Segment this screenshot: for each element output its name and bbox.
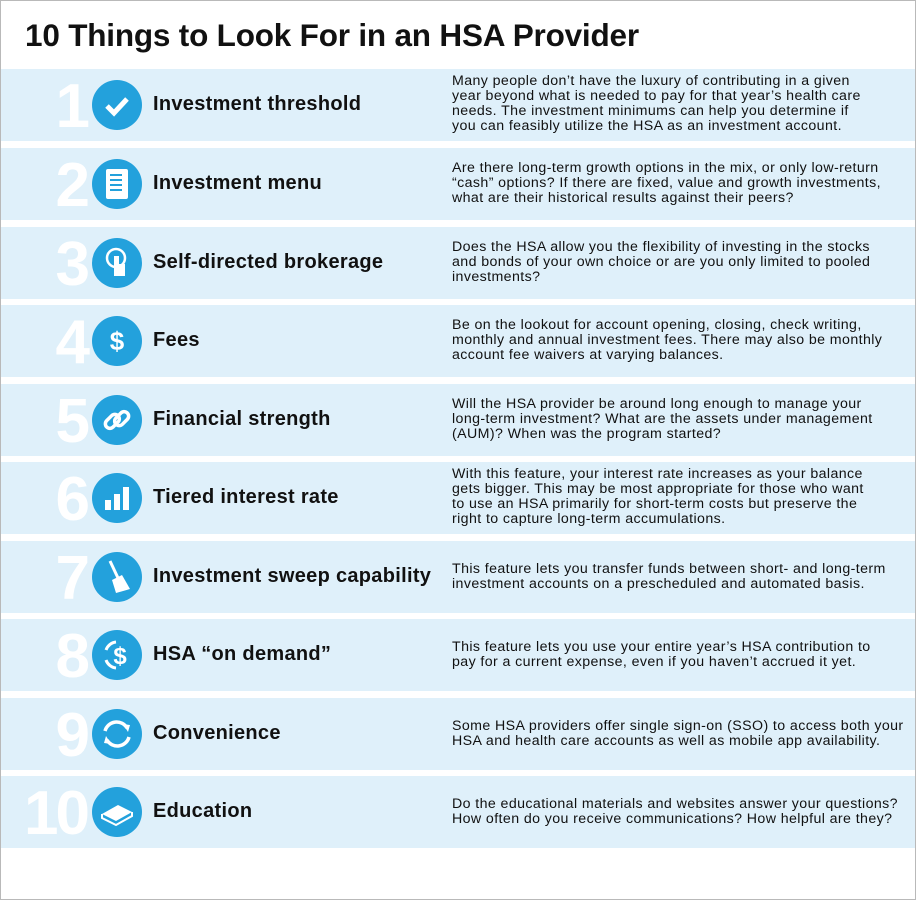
row 2: Investment menu (153, 172, 322, 194)
row 1: Many people don’t have the luxury of contributing in a given (452, 73, 850, 89)
row 10: How often do you receive communications? How helpful are they? (452, 811, 892, 827)
row 7 (1, 541, 915, 613)
icon: broom (92, 552, 142, 602)
row 1: year beyond what is needed to pay for that year’s health care (452, 88, 861, 104)
title: 10 Things to Look For in an HSA Provider (25, 17, 639, 53)
row 5: (AUM)? When was the program started? (452, 426, 721, 442)
icon: bars (92, 473, 142, 523)
row 5: Will the HSA provider be around long enough to manage your (452, 396, 862, 412)
row 7: This feature lets you transfer funds between short- and long-term (452, 561, 886, 577)
row 3: 3 (56, 230, 87, 299)
row 10: 10 (24, 779, 87, 848)
row 4: 4 (56, 308, 87, 377)
row 3: Does the HSA allow you the flexibility of investing in the stocks (452, 239, 870, 255)
row 8 (1, 619, 915, 691)
row 9: 9 (56, 701, 87, 770)
row 8: HSA “on demand” (153, 643, 331, 665)
row 8: 8 (56, 622, 87, 691)
row 1: 1 (56, 72, 87, 141)
row 6: to use an HSA primarily for short-term costs but preserve the (452, 496, 857, 512)
icon: book (92, 787, 142, 837)
icon: link (92, 395, 142, 445)
row 5: 5 (56, 387, 87, 456)
row 8: This feature lets you use your entire year’s HSA contribution to (452, 639, 871, 655)
row 6: gets bigger. This may be most appropriate for those who want (452, 481, 864, 497)
row 9: HSA and health care accounts as well as mobile app availability. (452, 733, 880, 749)
row 5: Financial strength (153, 408, 331, 430)
row 4: Fees (153, 329, 200, 351)
row 4: account fee waivers at varying balances. (452, 347, 724, 363)
row 9: Some HSA providers offer single sign-on (SSO) to access both your (452, 718, 904, 734)
row 3: Self-directed brokerage (153, 251, 383, 273)
icon: pointer (92, 238, 142, 288)
row 3: and bonds of your own choice or are you only limited to pooled (452, 254, 870, 270)
icon: menu (92, 159, 142, 209)
row 4: Be on the lookout for account opening, closing, check writing, (452, 317, 862, 333)
row 2: “cash” options? If there are fixed, value and growth investments, (452, 175, 881, 191)
row 1: Investment threshold (153, 93, 361, 115)
row 6 (1, 462, 915, 534)
icon: dollar arrows: $ (113, 643, 127, 670)
row 1: needs. The investment minimums can help you determine if (452, 103, 849, 119)
icon: dollar: $ (110, 326, 125, 356)
row 1 (1, 69, 915, 141)
icon: dollar arrows (92, 630, 142, 680)
row 3 (1, 227, 915, 299)
row 2 (1, 148, 915, 220)
row 2: what are their historical results against their peers? (452, 190, 794, 206)
row 10: Education (153, 800, 252, 822)
row 7: 7 (56, 544, 87, 613)
row 10 (1, 776, 915, 848)
icon: check (92, 80, 142, 130)
row 7: Investment sweep capability (153, 565, 431, 587)
row 2: Are there long-term growth options in the mix, or only low-return (452, 160, 879, 176)
row 1: you can feasibly utilize the HSA as an investment account. (452, 118, 842, 134)
row 6: 6 (56, 465, 87, 534)
icon: dollar (92, 316, 142, 366)
icon: refresh (92, 709, 142, 759)
row 6: With this feature, your interest rate increases as your balance (452, 466, 863, 482)
row 4 (1, 305, 915, 377)
row 5: long-term investment? What are the assets under management (452, 411, 873, 427)
row 6: Tiered interest rate (153, 486, 339, 508)
row 4: monthly and annual investment fees. There may also be monthly (452, 332, 882, 348)
row 3: investments? (452, 269, 540, 285)
row 8: pay for a current expense, even if you haven’t accrued it yet. (452, 654, 856, 670)
row 5 (1, 384, 915, 456)
row 9: Convenience (153, 722, 281, 744)
row 9 (1, 698, 915, 770)
row 2: 2 (56, 151, 87, 220)
row 10: Do the educational materials and websites answer your questions? (452, 796, 898, 812)
row 7: investment accounts on a prescheduled and automated basis. (452, 576, 865, 592)
row 6: right to capture long-term accumulations. (452, 511, 725, 527)
